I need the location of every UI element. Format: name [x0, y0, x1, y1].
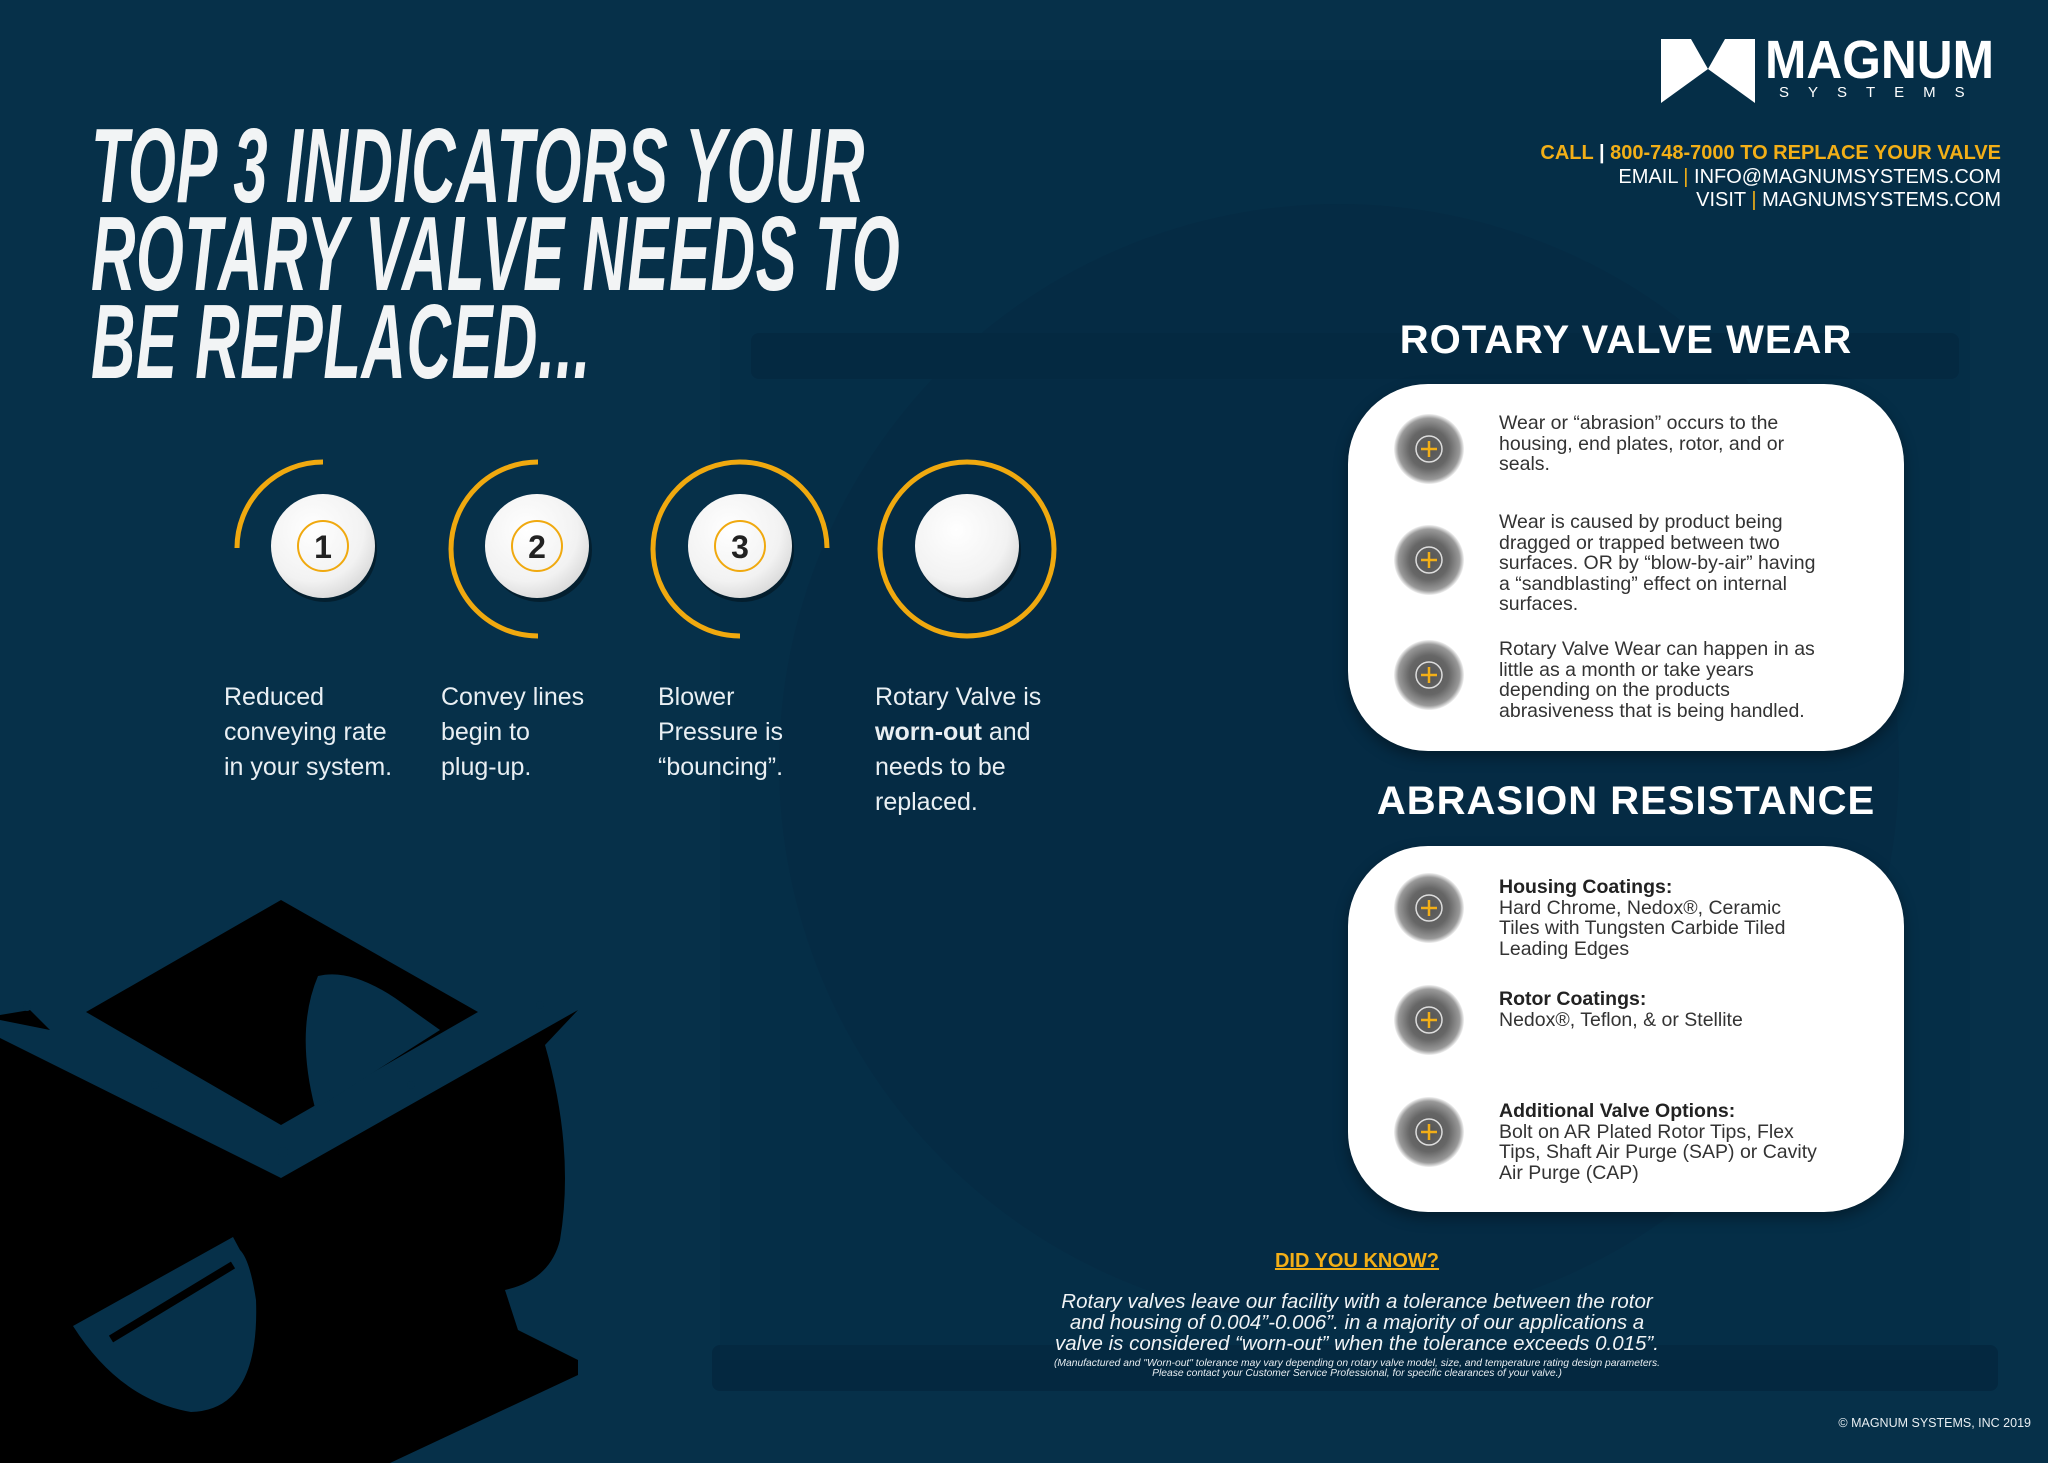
text rotor coatings [1499, 988, 1743, 1030]
footnote: Please contact your Customer Service Professional, for specific clearances of your valve.) [1152, 1368, 1562, 1379]
step 3 text: Pressure is [658, 718, 783, 746]
text 2: a “sandblasting” effect on internal [1499, 572, 1787, 594]
text 2: surfaces. [1499, 593, 1578, 615]
icon: plus housing [1394, 873, 1464, 943]
icon: plus 3 [1394, 640, 1464, 710]
text rotor coatings: Rotor Coatings: [1499, 988, 1646, 1010]
step 3 text: “bouncing”. [658, 753, 783, 781]
circle 3 [653, 462, 827, 636]
text 3: little as a month or take years [1499, 658, 1754, 680]
step 4 text: Rotary Valve is [875, 683, 1041, 711]
text rotor coatings: Nedox®, Teflon, & or Stellite [1499, 1008, 1743, 1030]
title: ROTARY VALVE NEEDS TO [91, 195, 900, 313]
step 4 text: worn-out and [875, 718, 1031, 746]
step 2 text: begin to [441, 718, 530, 746]
circle 2 [451, 462, 592, 636]
contact info [1540, 142, 2001, 211]
text additional options: Air Purge (CAP) [1499, 1162, 1639, 1184]
text housing coatings: Leading Edges [1499, 938, 1629, 960]
valve silhouette bottom-left [0, 900, 578, 1463]
text housing coatings: Housing Coatings: [1499, 876, 1672, 898]
icon: plus 2 [1394, 525, 1464, 595]
heading: abrasion resistance: ABRASION RESISTANCE [1377, 779, 1875, 823]
contact info: VISIT | MAGNUMSYSTEMS.COM [1696, 189, 2001, 211]
footnote: (Manufactured and "Worn-out" tolerance may vary depending on rotary valve model, size, and temperature rating design parameters. [1054, 1358, 1660, 1369]
step 4 text: replaced. [875, 788, 978, 816]
text 3: depending on the products [1499, 679, 1730, 701]
step 2 text [441, 683, 584, 781]
text additional options: Tips, Shaft Air Purge (SAP) or Cavity [1499, 1141, 1817, 1163]
text 2: Wear is caused by product being [1499, 511, 1783, 533]
did you know text: valve is considered “worn-out” when the tolerance exceeds 0.015”. [1055, 1332, 1659, 1355]
panel: rotary valve wear [1348, 384, 1904, 751]
text 1: Wear or “abrasion” occurs to the [1499, 412, 1778, 434]
text 1 [1499, 412, 1784, 475]
text 3 [1499, 638, 1815, 722]
circle 4 [880, 462, 1054, 636]
step 1 text: conveying rate [224, 718, 387, 746]
logo [1661, 30, 1994, 103]
text 1: housing, end plates, rotor, and or [1499, 432, 1784, 454]
text housing coatings: Tiles with Tungsten Carbide Tiled [1499, 917, 1786, 939]
panel: abrasion resistance [1348, 846, 1904, 1212]
text 3: Rotary Valve Wear can happen in as [1499, 638, 1815, 660]
step 2 text: Convey lines [441, 683, 584, 711]
contact info: CALL | 800-748-7000 TO REPLACE YOUR VALVE [1540, 142, 2001, 164]
logo: SYSTEMS [1779, 84, 1984, 101]
text additional options: Bolt on AR Plated Rotor Tips, Flex [1499, 1120, 1794, 1142]
icon: plus 1 [1394, 414, 1464, 484]
text additional options [1499, 1100, 1817, 1184]
text 2: dragged or trapped between two [1499, 532, 1780, 554]
title: BE REPLACED... [91, 283, 591, 401]
contact info: EMAIL | INFO@MAGNUMSYSTEMS.COM [1618, 166, 2001, 188]
heading: rotary valve wear: ROTARY VALVE WEAR [1400, 318, 1852, 362]
step 4 text: needs to be [875, 753, 1006, 781]
step 4 text [874, 683, 1041, 816]
did you know heading: DID YOU KNOW? [1275, 1250, 1439, 1272]
icon: plus rotor [1394, 985, 1464, 1055]
title: TOP 3 INDICATORS YOUR [91, 107, 865, 225]
indicator circles [234, 460, 1056, 638]
step 1 text: in your system. [224, 753, 392, 781]
text 3: abrasiveness that is being handled. [1499, 700, 1805, 722]
text 2: surfaces. OR by “blow-by-air” having [1499, 552, 1815, 574]
footnote [1054, 1358, 1660, 1379]
text additional options: Additional Valve Options: [1499, 1100, 1735, 1122]
title [91, 107, 900, 401]
text 1: seals. [1499, 453, 1550, 475]
step 2 text: plug-up. [441, 753, 531, 781]
logo: MAGNUM [1765, 30, 1994, 90]
circle 1: 1 [314, 529, 332, 565]
text housing coatings [1499, 876, 1786, 960]
step 1 text: Reduced [224, 683, 324, 711]
text 2 [1499, 511, 1815, 615]
circle 1 [237, 462, 377, 602]
icon: plus options [1394, 1097, 1464, 1167]
step 3 text [658, 683, 783, 781]
step 3 text: Blower [658, 683, 734, 711]
did you know text [1055, 1290, 1659, 1355]
step 1 text [224, 683, 392, 781]
did you know text: and housing of 0.004”-0.006”. in a majority of our applications a [1070, 1311, 1644, 1334]
circle 3: 3 [731, 529, 749, 565]
circle 2: 2 [528, 529, 546, 565]
did you know text: Rotary valves leave our facility with a tolerance between the rotor [1061, 1290, 1653, 1313]
copyright: © MAGNUM SYSTEMS, INC 2019 [1838, 1416, 2031, 1430]
text housing coatings: Hard Chrome, Nedox®, Ceramic [1499, 896, 1781, 918]
